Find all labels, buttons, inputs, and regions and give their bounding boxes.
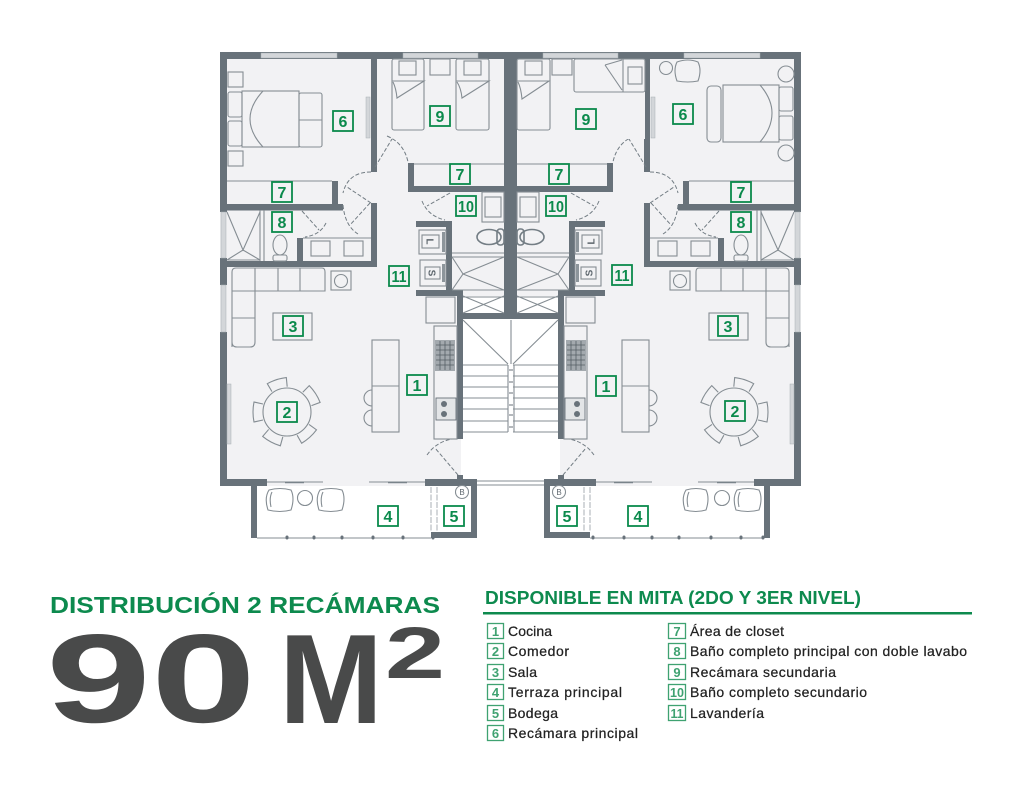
- legend column 1: [488, 623, 638, 741]
- legend column 2: Baño completo secundario: [690, 684, 867, 700]
- legend column 2: Lavandería: [690, 705, 764, 721]
- machine and storage letters: S: [426, 270, 436, 277]
- room number tags: 4: [634, 509, 643, 526]
- room number tags: 2: [731, 404, 740, 421]
- room number tags: 6: [679, 107, 688, 124]
- room number tags: 8: [737, 215, 746, 232]
- terrace rail: [257, 537, 431, 539]
- room number tags: [272, 104, 751, 526]
- room number tags: 6: [339, 114, 348, 131]
- machine and storage letters: B: [556, 488, 562, 497]
- right apartment mirrored: [510, 52, 801, 538]
- legend column 1: 6: [492, 726, 499, 741]
- outer and interior walls: [220, 52, 511, 538]
- legend column 1: Comedor: [508, 643, 569, 659]
- room number tags: 10: [548, 199, 564, 216]
- room number tags: 4: [384, 509, 393, 526]
- room number tags: 9: [436, 109, 445, 126]
- storage fixtures: [431, 486, 468, 532]
- machine and storage letters: L: [586, 238, 598, 245]
- left terrace furniture: [266, 488, 433, 538]
- machine and storage letters: B: [459, 488, 465, 497]
- legend column 1: Cocina: [508, 623, 552, 639]
- kitchen: [426, 297, 457, 439]
- room number tags: 1: [602, 379, 611, 396]
- legend column 1: Recámara principal: [508, 725, 638, 741]
- big area figure: 2: [385, 613, 445, 694]
- legend column 1: Sala: [508, 664, 537, 680]
- bathroom 10 fixtures: [452, 192, 504, 290]
- machine and storage letters: L: [424, 238, 434, 245]
- room number tags: 7: [278, 185, 287, 202]
- legend column 1: 3: [492, 665, 499, 680]
- door swings: [302, 136, 458, 475]
- room number tags: 3: [289, 319, 298, 336]
- shaft: [463, 296, 504, 313]
- room number tags: 5: [450, 509, 459, 526]
- legend column 1: 4: [492, 685, 500, 700]
- windows: [221, 53, 478, 444]
- bathroom 8 fixtures: [227, 210, 371, 261]
- secondary bedroom left furniture: [392, 59, 489, 130]
- legend column 2: 9: [673, 665, 681, 680]
- heading rule: [483, 612, 972, 614]
- left apartment walls and fixtures: [220, 52, 511, 538]
- room number tags: 7: [555, 167, 564, 184]
- legend column 1: 2: [492, 644, 499, 659]
- room number tags: 11: [614, 268, 630, 285]
- room number tags: 9: [582, 112, 591, 129]
- legend column 2: 11: [670, 706, 684, 721]
- room number tags: 3: [724, 319, 733, 336]
- legend column 2: [668, 623, 967, 721]
- legend column 1: 5: [492, 706, 499, 721]
- master bedroom left furniture: [228, 72, 322, 166]
- room number tags: 7: [737, 185, 746, 202]
- availability heading: DISPONIBLE EN MITA (2DO Y 3ER NIVEL): [485, 588, 861, 608]
- legend column 2: 8: [673, 644, 681, 659]
- closet fronts: [227, 164, 504, 181]
- room number tags: 11: [392, 269, 407, 286]
- living room furniture: [232, 268, 351, 347]
- right terrace furniture: [593, 488, 763, 538]
- kitchen island: [364, 340, 399, 432]
- legend column 2: Recámara secundaria: [690, 664, 836, 680]
- room number tags: 2: [283, 405, 292, 422]
- legend column 1: Terraza principal: [508, 684, 622, 700]
- big area figure: 90: [46, 608, 256, 749]
- laundry machines: [419, 230, 446, 286]
- stairs: [463, 320, 558, 432]
- master bedroom right furniture: [660, 60, 794, 161]
- legend column 2: Área de closet: [690, 623, 784, 639]
- big area figure: M: [279, 608, 383, 750]
- machine and storage letters: S: [584, 269, 596, 276]
- room number tags: 7: [456, 167, 465, 184]
- dining table: [253, 377, 321, 447]
- legend column 1: Bodega: [508, 705, 558, 721]
- room number tags: 10: [458, 199, 474, 216]
- legend column 2: Baño completo principal con doble lavabo: [690, 643, 967, 659]
- heading: distribution: DISTRIBUCIÓN 2 RECÁMARAS: [50, 591, 440, 618]
- floor plan: [220, 52, 801, 538]
- room number tags: 8: [278, 215, 287, 232]
- room number tags: 5: [563, 509, 572, 526]
- machine and storage letters: [424, 238, 598, 497]
- legend column 2: 7: [673, 624, 681, 639]
- legend column 2: 10: [670, 685, 684, 700]
- sliding doors: [267, 481, 511, 485]
- big area figure: [46, 608, 445, 750]
- secondary bedroom right furniture: [516, 52, 646, 139]
- legend column 1: 1: [492, 624, 499, 639]
- room number tags: 1: [413, 378, 422, 395]
